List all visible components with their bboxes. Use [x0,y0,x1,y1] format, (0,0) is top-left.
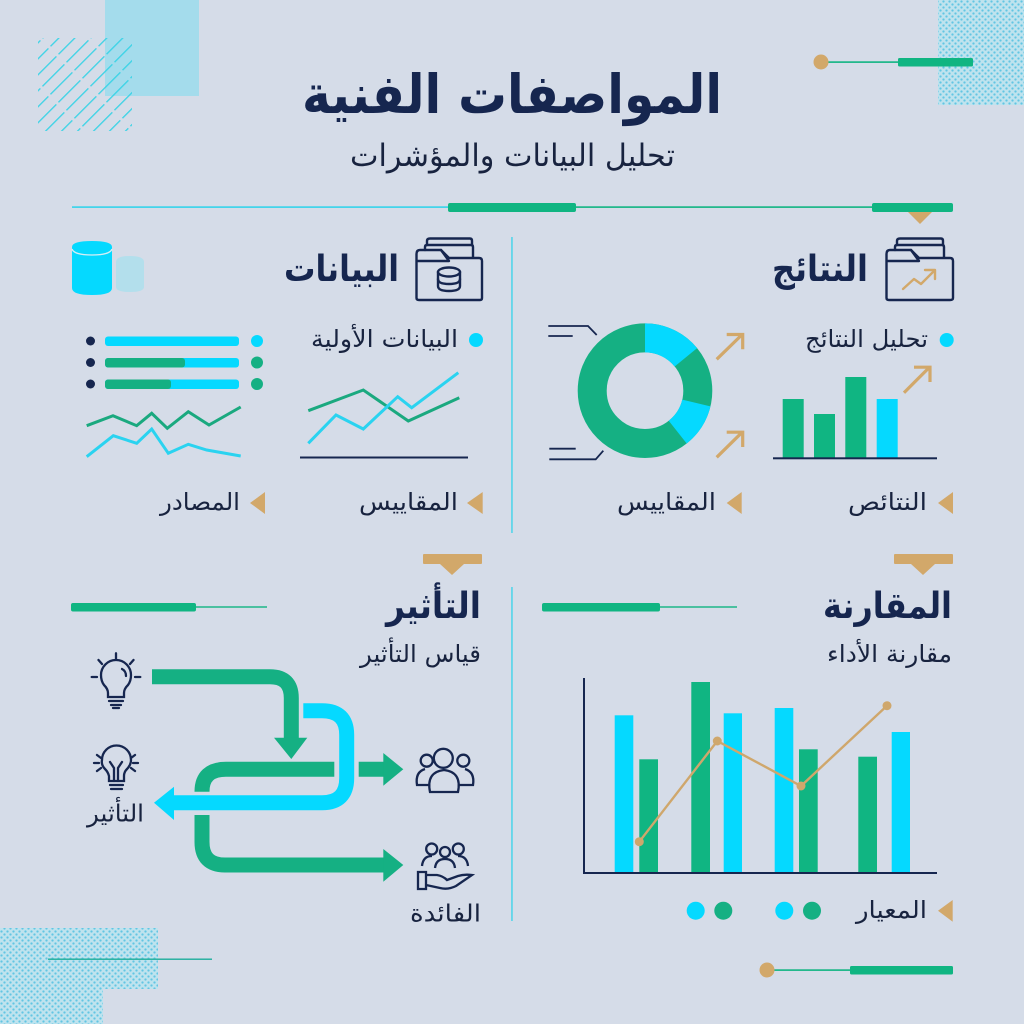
label: results: النتائص [848,488,927,516]
top right accent connector [814,54,973,70]
label: sources: المصادر [159,488,240,516]
heading: comparison: المقارنة [823,586,952,627]
label: results [848,488,953,516]
subtitle: measuring impact: قياس التأثير [359,637,481,668]
gold flag [423,554,482,575]
gold flag [894,554,953,575]
label: measures: المقاييس [617,488,716,516]
donut chart [581,327,709,454]
heading: data: البيانات [284,249,399,290]
label: raw data: البيانات الأولية [311,324,458,353]
heading: impact: التأثير [384,582,481,627]
heading: results: النتائج [772,249,868,290]
label: results analysis: تحليل النتائج [805,325,928,353]
icon: bulb middle [94,746,138,789]
green accent line [542,603,737,612]
icon: people group [417,749,473,792]
panel: data [72,238,483,516]
decorative corner: top right dots [938,0,1024,105]
panel: results [548,238,954,516]
panel: impact [71,554,482,928]
subtitle: تحليل البيانات والمؤشرات [350,138,675,174]
icon: data folder [416,238,482,300]
flow diagram [152,677,403,882]
header divider [72,203,953,224]
label: criterion [855,896,953,924]
label: measures: المقاييس [359,488,458,516]
arrow: green short [359,753,403,786]
vertical divider bottom [511,587,513,921]
line chart: sources [87,407,241,457]
icon: bulb top [92,653,140,708]
icon: results folder [886,238,953,300]
panel: comparison [542,554,953,924]
icon: gold arrows [717,334,930,457]
donut leader lines [548,326,603,459]
subtitle: performance comparison: مقارنة الأداء [827,639,952,668]
decorative corner: hatch and blue square [38,0,199,131]
vertical divider top [511,237,513,533]
arrow: green lower [202,815,403,882]
arrow: green top [152,677,307,759]
progress list [86,335,263,390]
connector: green middle [202,769,334,792]
title: المواصفات الفنية [302,63,722,126]
bottom right accent connector [760,962,953,978]
line chart: measures [300,373,468,458]
label: benefit: الفائدة [410,900,481,928]
decorative corner: bottom left dots [0,928,212,1024]
legend dots [687,902,821,920]
label: criterion: المعيار [855,896,927,924]
bar and line chart [584,678,937,873]
icon: database cylinders [72,241,144,295]
bar chart: results [773,377,937,459]
icon: people and hand [418,844,472,889]
arrow: cyan [154,711,347,820]
green accent line [71,603,267,612]
label: impact: التأثير [86,797,144,828]
